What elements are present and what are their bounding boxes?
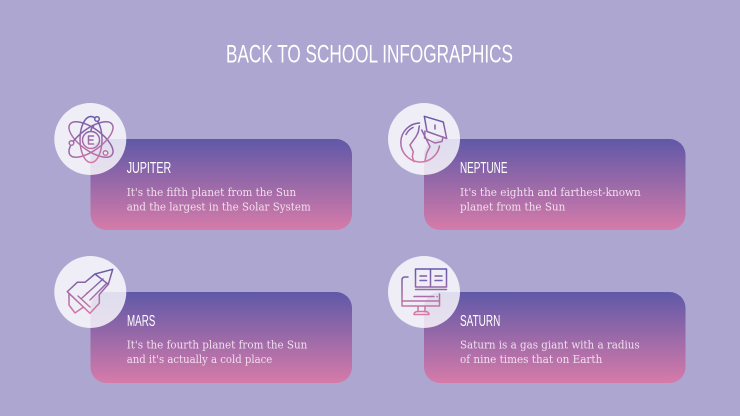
text: Jupiter description: and the largest in the Solar System bbox=[127, 200, 311, 214]
text: Mars description: and it's actually a cold place bbox=[127, 353, 273, 366]
heading: Mars: MARS bbox=[127, 313, 155, 330]
panel: Jupiter bbox=[54, 103, 352, 230]
text: Saturn description: of nine times that on Earth bbox=[460, 353, 602, 366]
card: Jupiter bbox=[90, 139, 352, 230]
text: Mars description: It's the fourth planet from the Sun bbox=[127, 338, 307, 352]
card: Mars bbox=[90, 292, 352, 383]
icon: atom with apple bbox=[63, 115, 119, 164]
icon circle: Mars bbox=[54, 256, 126, 328]
text: Saturn description bbox=[460, 338, 640, 366]
panel: Saturn bbox=[388, 256, 686, 383]
text: Mars description bbox=[127, 338, 307, 366]
panel: Neptune bbox=[388, 103, 686, 230]
icon: globe with graduation cap bbox=[401, 116, 447, 162]
heading: Jupiter: JUPITER bbox=[127, 160, 171, 177]
icon: pencil rocket bbox=[67, 269, 113, 313]
card: Saturn bbox=[424, 292, 686, 383]
title: BACK TO SCHOOL INFOGRAPHICS bbox=[226, 40, 513, 68]
text: Saturn description: Saturn is a gas giant with a radius bbox=[460, 338, 640, 352]
text: Jupiter description: It's the fifth planet from the Sun bbox=[127, 186, 296, 199]
text: Neptune description bbox=[460, 186, 641, 214]
card: Neptune bbox=[424, 139, 686, 230]
heading: Neptune: NEPTUNE bbox=[460, 160, 508, 177]
text: Jupiter description bbox=[127, 186, 311, 214]
icon circle: Saturn bbox=[388, 256, 460, 328]
text: Neptune description: It's the eighth and farthest-known bbox=[460, 186, 641, 199]
panel: Mars bbox=[54, 256, 352, 383]
icon circle: Neptune bbox=[388, 103, 460, 175]
icon circle: Jupiter bbox=[54, 103, 126, 175]
text: Neptune description: planet from the Sun bbox=[460, 200, 565, 214]
heading: Saturn: SATURN bbox=[460, 313, 500, 330]
icon: book and monitor bbox=[402, 269, 446, 314]
